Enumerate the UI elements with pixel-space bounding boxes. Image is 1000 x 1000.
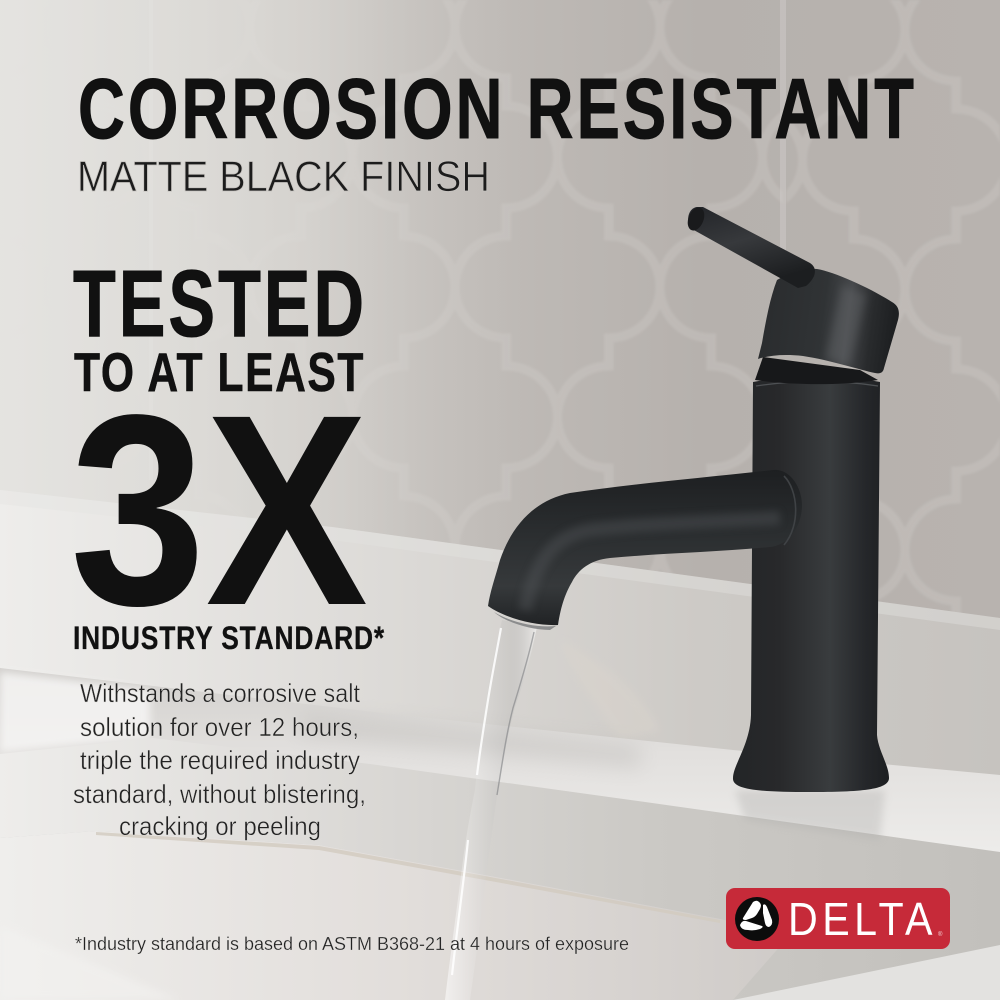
body copy: Withstands a corrosive salt — [80, 678, 361, 708]
to at least: TO AT LEAST — [74, 341, 365, 403]
water stream — [445, 620, 537, 1000]
logo: Delta: ® — [938, 931, 943, 938]
lever — [685, 205, 815, 288]
3X figure: 3X — [70, 358, 369, 662]
counter front edge — [0, 738, 1000, 1000]
arabesque tile pattern right of grout — [786, 0, 1000, 640]
logo wordmark: DELTA — [788, 893, 937, 945]
body rim — [756, 382, 878, 386]
arabesque tile pattern — [0, 0, 783, 640]
backsplash — [0, 490, 1000, 800]
body copy: standard, without blistering, — [73, 779, 366, 809]
aerator — [494, 612, 556, 630]
spout — [488, 470, 802, 630]
tile wall — [0, 0, 1000, 640]
footnote: *Industry standard is based on ASTM B368-21 at 4 hours of exposure — [75, 934, 629, 954]
left light wash — [0, 0, 520, 640]
tested: TESTED — [73, 251, 367, 357]
body copy — [73, 678, 366, 841]
body copy: solution for over 12 hours, — [80, 712, 359, 742]
lower right marble — [733, 945, 1000, 1000]
subheading: matte black finish: MATTE BLACK FINISH — [77, 153, 490, 201]
counter top — [0, 668, 1000, 860]
logo: Delta — [726, 888, 950, 949]
faucet reflection — [735, 790, 885, 840]
industry standard: INDUSTRY STANDARD* — [73, 620, 385, 656]
neck under handle — [755, 357, 878, 384]
body copy: cracking or peeling — [119, 811, 321, 841]
sink — [0, 831, 790, 1000]
handle — [758, 269, 899, 373]
faucet body — [733, 377, 889, 792]
logo mark — [735, 897, 779, 941]
body copy: triple the required industry — [80, 745, 360, 775]
claim block — [70, 251, 385, 662]
faucet — [488, 205, 899, 792]
